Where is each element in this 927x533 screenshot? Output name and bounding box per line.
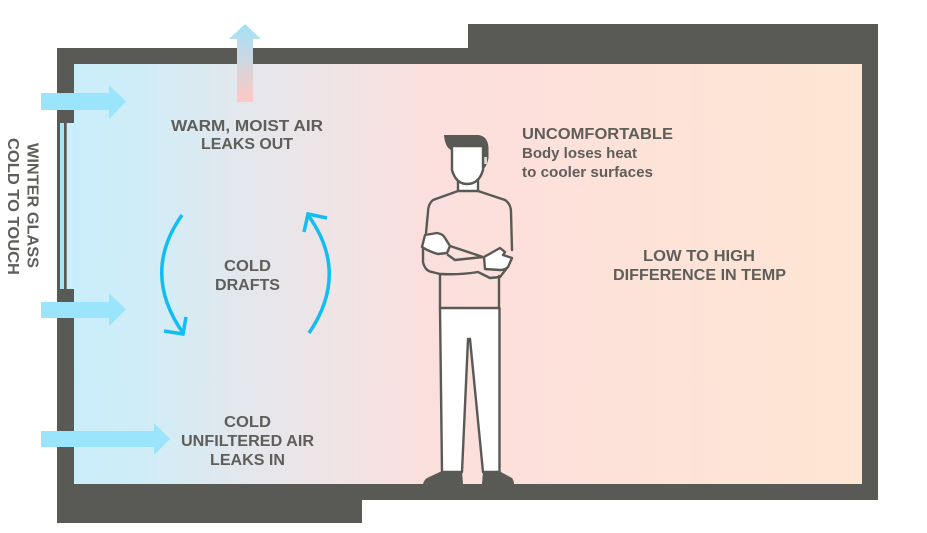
arrow: cold draft falling [162, 215, 186, 334]
label: low to high difference in temp: LOW TO HIGH [643, 248, 755, 265]
trousers [440, 308, 500, 472]
room interior with temperature gradient [74, 64, 862, 484]
hair [444, 135, 488, 172]
torso and arms outline [423, 191, 512, 308]
label: cold drafts: DRAFTS [215, 277, 280, 294]
left hand [422, 233, 450, 254]
label: low to high difference in temp [613, 248, 786, 284]
right shoe [482, 471, 514, 484]
arrow: cold draft rising [304, 214, 329, 333]
label: uncomfortable: to cooler surfaces [522, 165, 653, 181]
label: winter glass [4, 138, 40, 275]
arrow: warm air out [229, 24, 261, 102]
label: cold unfiltered air leaks in: COLD [224, 414, 271, 431]
label: warm moist air leaks out: LEAKS OUT [201, 136, 294, 153]
arrow: cold air in, middle [41, 293, 126, 326]
label: winter glass: COLD TO TOUCH [4, 138, 21, 275]
right hand [484, 248, 512, 270]
label: uncomfortable [522, 126, 673, 181]
label: warm moist air leaks out: WARM, MOIST AIR [171, 118, 323, 135]
label: cold drafts: COLD [224, 258, 271, 275]
neck [458, 178, 478, 191]
label: uncomfortable: Body loses heat [522, 146, 637, 162]
arrow: cold air in, top [41, 85, 126, 119]
ear [484, 157, 487, 164]
label: cold drafts [215, 258, 280, 294]
label: cold unfiltered air leaks in: LEAKS IN [210, 452, 285, 469]
label: uncomfortable: UNCOMFORTABLE [522, 126, 673, 143]
label: cold unfiltered air leaks in: UNFILTERED AIR [181, 433, 314, 450]
label: winter glass: WINTER GLASS [24, 143, 40, 268]
window: winter glass [57, 123, 74, 289]
label: warm moist air leaks out [171, 118, 323, 153]
label: low to high difference in temp: DIFFERENCE IN TEMP [613, 267, 786, 284]
face [452, 146, 483, 184]
left shoe [423, 471, 463, 484]
arrow: cold air in, bottom [41, 423, 170, 455]
person with crossed arms [422, 135, 514, 484]
label: cold unfiltered air leaks in [181, 414, 314, 469]
